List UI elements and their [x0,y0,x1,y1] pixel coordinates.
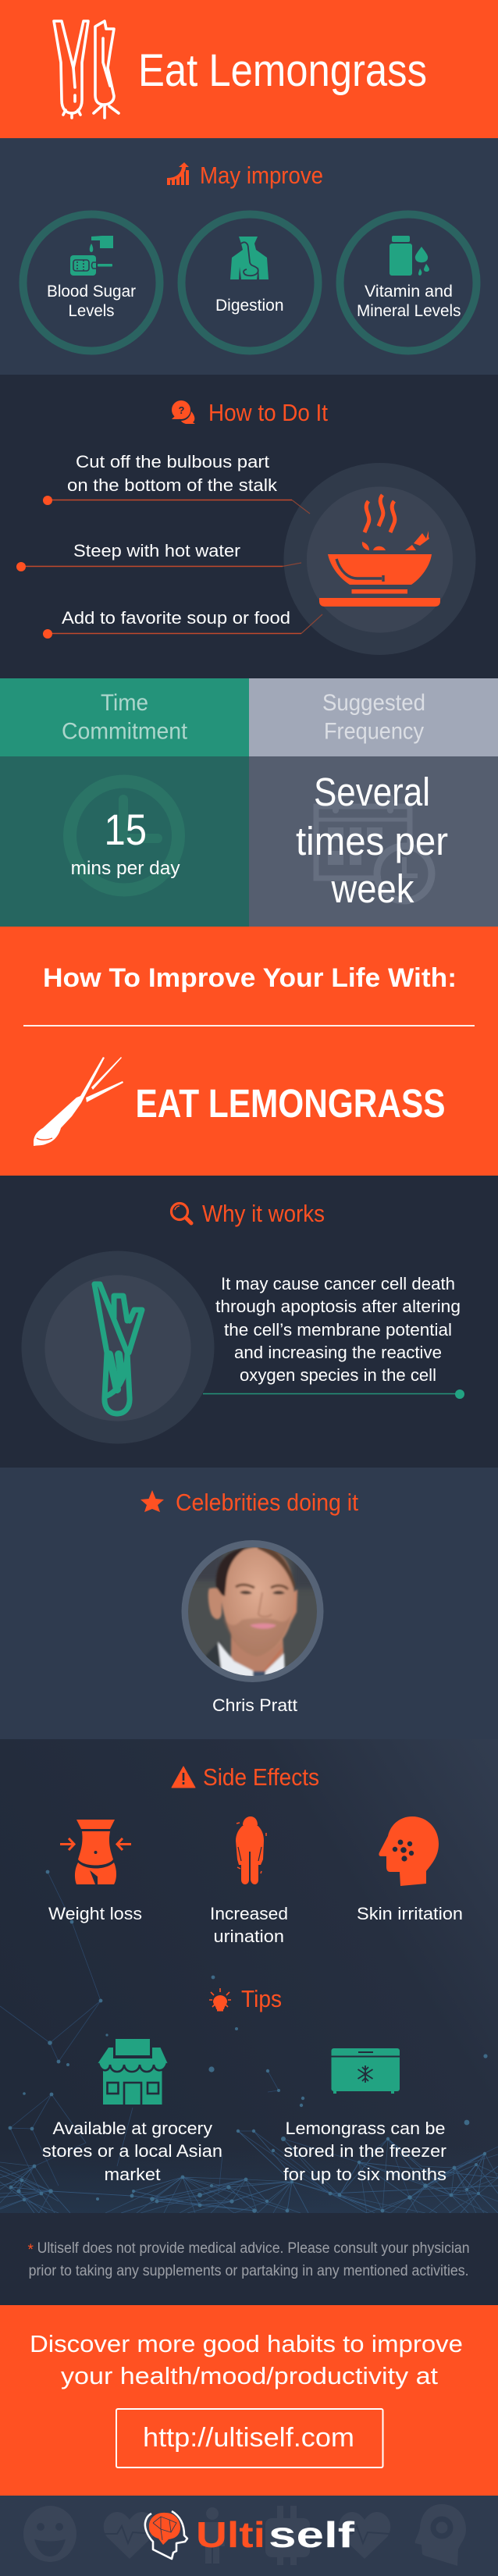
unit: mins per day: mins per day [71,858,180,879]
disclaimer text: Ultiself does not provide medical advice. Please consult your physician [37,2240,470,2257]
heading: why it works: Why it works [202,1200,325,1227]
link button: http://ultiself.com [143,2423,354,2453]
side effect: skin irritation [357,1816,463,1923]
label: Blood Sugar [47,283,136,301]
network background [0,1870,498,2213]
watermark icons [23,2504,466,2566]
tip text: market [105,2165,161,2184]
panel: footer logo [0,2496,498,2576]
heading: how to improve your life with: How To Improve Your Life With: [43,963,457,993]
icon: warning triangle [172,1767,195,1788]
explanation text: It may cause cancer cell death [221,1274,455,1293]
explanation text: oxygen species in the cell [240,1365,436,1385]
panel: suggested frequency [249,678,498,927]
icon: glucose meter [70,236,113,276]
icon: lemongrass silhouette [34,1057,123,1146]
heading: celebrities doing it: Celebrities doing it [176,1489,358,1516]
panel: celebrities [0,1468,498,1739]
label: urination [214,1927,284,1946]
disclaimer text [29,2240,470,2279]
tip text: Lemongrass can be [286,2119,445,2138]
panel: how to do it [0,375,498,678]
icon: magnifier [172,1204,191,1223]
value: 15: 15 [105,805,147,854]
icon: clock watermark [70,781,178,890]
side effect: weight loss [48,1820,142,1923]
step 1 [43,452,310,514]
icon: light bulb [209,1988,231,2011]
panel: how to improve banner [0,927,498,1176]
label: Skin irritation [357,1904,463,1923]
heading: how to do it: How to Do It [208,399,328,426]
panel: header [0,0,498,138]
benefit: blood sugar levels [23,214,159,351]
value: several times per week: times per [296,819,448,863]
disclaimer text: prior to taking any supplements or partaking in any mentioned activities. [29,2263,469,2279]
icon: lemongrass stalks [54,21,119,118]
portrait: chris pratt [181,1540,324,1682]
title: eat lemongrass: EAT LEMONGRASS [136,1081,445,1126]
title: Eat Lemongrass [138,45,427,96]
value: several times per week: Several [314,770,430,814]
heading: tips: Tips [241,1985,282,2012]
explanation text [215,1274,461,1385]
value: several times per week [296,770,448,911]
icon: chest freezer [331,2048,400,2094]
icon: growth chart [167,162,189,185]
benefit: digestion [181,214,318,351]
call to action text: your health/mood/productivity at [61,2362,438,2389]
heading: time commitment: Commitment [62,718,188,745]
explanation text: through apoptosis after altering [215,1297,461,1316]
icon: soup bowl [319,495,440,607]
panel: why it works [0,1176,498,1468]
explanation text: the cell’s membrane potential [224,1320,452,1340]
tip: freezer [283,2048,446,2184]
logo wordmark: self: self [269,2514,355,2555]
call to action text [30,2330,463,2389]
icon: leek stalk [94,1284,142,1414]
step 1: Cut off the bulbous part [76,452,269,471]
icon: question bubbles [172,400,195,424]
heading: time commitment: Time [101,690,148,716]
tip text: stores or a local Asian [42,2141,222,2161]
heading: time commitment [62,690,188,745]
bowl illustration [284,463,476,655]
panel: may improve [0,138,498,375]
connector line [203,1389,464,1399]
label: Levels [69,302,114,320]
tip text: Available at grocery [53,2119,212,2138]
icon: star [141,1490,164,1512]
step 3 [43,608,322,639]
call to action text: Discover more good habits to improve [30,2330,463,2357]
name: chris pratt: Chris Pratt [212,1695,297,1715]
icon: waist [60,1820,131,1884]
value: several times per week: week [331,866,414,911]
tip text: stored in the freezer [284,2141,446,2161]
panel: disclaimer [0,2213,498,2305]
logo icon [145,2511,187,2559]
benefit: vitamin and mineral levels [340,214,476,351]
icon: store [98,2039,168,2105]
heading: suggested frequency: Frequency [324,718,424,745]
leek illustration [22,1251,214,1444]
label: Weight loss [48,1904,142,1923]
heading: side effects: Side Effects [203,1763,319,1791]
icon: question bubbles: ? [178,404,184,416]
heading: may improve: May improve [200,162,323,189]
icon: person [236,1816,266,1884]
step 2: Steep with hot water [73,541,240,560]
link button [116,2409,382,2467]
logo wordmark: ulti: Ulti [196,2514,265,2555]
label: Mineral Levels [357,302,461,320]
panel: call to action [0,2305,498,2496]
explanation text: and increasing the reactive [234,1343,442,1362]
step 2 [16,541,301,571]
panel: side effects and tips [0,1739,498,2213]
icon: digestive system [230,237,269,279]
label: Digestion [215,297,284,315]
heading: suggested frequency [322,690,425,745]
label: Vitamin and [365,283,453,301]
icon: vitamin bottle [390,236,429,276]
icon: calendar watermark [316,798,432,901]
tip: grocery stores [42,2039,222,2184]
heading: suggested frequency: Suggested [322,690,425,716]
tip text: for up to six months [283,2165,446,2184]
step 3: Add to favorite soup or food [62,608,290,628]
panel: time commitment [0,678,249,927]
asterisk: * [28,2242,34,2258]
icon: head with spots [379,1816,439,1886]
label: Increased [210,1904,288,1923]
side effect: increased urination [210,1816,288,1946]
step 1: on the bottom of the stalk [67,475,278,495]
